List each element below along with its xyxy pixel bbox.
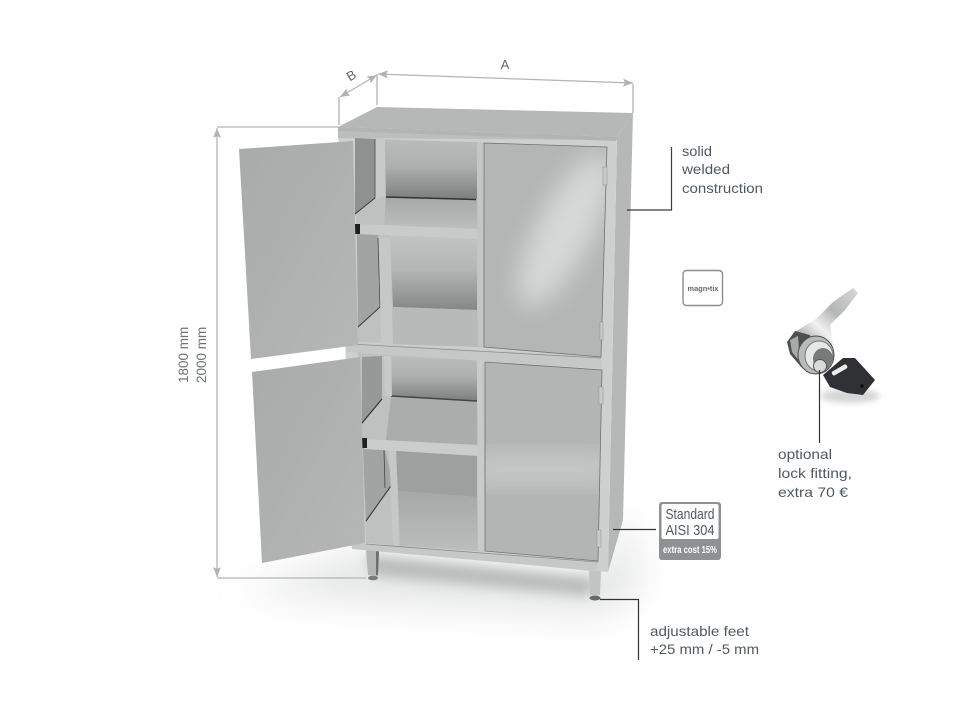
- dimension: A: [377, 74, 633, 113]
- badge: Standard AISI 304: Standard: [666, 506, 714, 523]
- label 1800 mm: 1800 mm: [176, 327, 191, 383]
- door: lower left open: [252, 357, 365, 563]
- callout: optional lock fitting: [778, 370, 852, 500]
- cabinet top: [338, 107, 633, 137]
- callout: solid welded construction: construction: [682, 180, 763, 196]
- door: upper right: [484, 142, 608, 358]
- infographic: cabinet with dimensions and callouts: [178, 60, 881, 660]
- badge: Standard AISI 304: extra cost 15%: [663, 545, 717, 556]
- callout line: AISI 304: [613, 528, 656, 530]
- lower compartment interior: [358, 352, 485, 552]
- label B: B: [344, 67, 359, 84]
- callout: adjustable feet: [600, 600, 759, 660]
- badge: magnetix: magn•tix: [688, 286, 719, 293]
- dimension: B: [339, 75, 377, 125]
- callout: solid welded construction: [627, 143, 763, 210]
- callout: solid welded construction: welded: [681, 161, 730, 177]
- label A: A: [501, 57, 510, 72]
- feet: [366, 549, 601, 600]
- door: upper left open: [239, 141, 358, 359]
- middle rail: [347, 342, 602, 369]
- bottom rail: [352, 543, 598, 571]
- cabinet front frame: [338, 127, 617, 572]
- label 2000 mm: 2000 mm: [194, 327, 209, 383]
- callout: optional lock fitting: optional: [778, 446, 832, 462]
- door: lower right: [484, 362, 602, 562]
- badge: Standard AISI 304: [659, 502, 721, 560]
- dimension: height: [217, 127, 366, 578]
- callout: adjustable feet: +25 mm / -5 mm: [650, 641, 759, 657]
- icon: lock with key: [787, 288, 880, 403]
- hinges: [597, 167, 607, 547]
- floor shadow: [240, 510, 640, 615]
- cabinet side panel: [608, 113, 633, 572]
- callout: solid welded construction: solid: [682, 143, 712, 159]
- upper compartment interior: [355, 138, 484, 348]
- badge: magnetix: [683, 270, 722, 306]
- callout: optional lock fitting: extra 70 €: [778, 484, 848, 500]
- callout: adjustable feet: adjustable feet: [650, 623, 749, 639]
- callout: optional lock fitting: lock fitting,: [778, 465, 852, 481]
- badge: Standard AISI 304: AISI 304: [666, 522, 714, 539]
- cabinet: [239, 107, 633, 600]
